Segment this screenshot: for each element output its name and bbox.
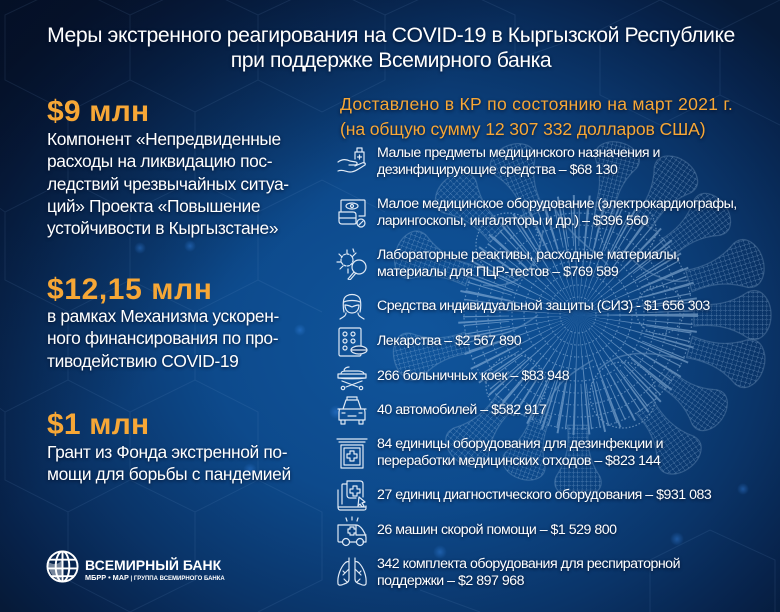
item: laboratory reagents: Лабораторные реактивы, расходные материалы,	[377, 246, 679, 262]
funding 1 description: устойчивости в Кыргызстане»	[47, 218, 278, 238]
item: respiratory equipment: 342 комплекта оборудования для респираторной	[377, 556, 680, 572]
item: small medical equipment	[376, 196, 737, 231]
funding 2 description	[47, 306, 280, 372]
icon: medicine	[338, 327, 368, 357]
funding 2 description: ного финансирования по про-	[47, 328, 278, 348]
item: disinfection equipment	[376, 436, 665, 470]
item: disinfection equipment: переработки медицинских отходов – $823 144	[377, 453, 660, 469]
funding 1 amount: $9 млн	[47, 95, 149, 128]
logo: World Bank	[46, 550, 225, 582]
funding 1 description: ций» Проекта «Повышение	[47, 196, 260, 216]
icon: person with mask	[339, 294, 365, 320]
item: laboratory reagents: материалы для ПЦР-тестов – $769 589	[377, 264, 618, 280]
item: small medical items: дезинфицирующие средства – $68 130	[377, 162, 617, 178]
funding 3 amount: $1 млн	[47, 408, 149, 441]
item: small medical items: Малые предметы медицинского назначения и	[377, 144, 660, 160]
icon: lungs	[337, 557, 367, 586]
item: respiratory equipment	[376, 556, 681, 590]
funding 1 description: расходы на ликвидацию пос-	[47, 151, 272, 171]
delivered heading	[338, 94, 733, 141]
item: PPE: Средства индивидуальной защиты (СИЗ) - $1 656 303	[377, 298, 710, 314]
item: laboratory reagents	[376, 246, 680, 281]
icon: hospital bed	[337, 366, 367, 390]
icon: diagnostic equipment	[337, 480, 367, 511]
item: small medical equipment: ларингоскопы, ингаляторы и др.) – $396 560	[377, 213, 648, 229]
funding 3 description	[47, 442, 292, 486]
delivered heading: Доставлено в КР по состоянию на март 2021 г.	[340, 94, 733, 114]
item: diagnostic equipment: 27 единиц диагностического оборудования – $931 083	[377, 486, 711, 502]
item: cars: 40 автомобилей – $582 917	[377, 402, 546, 418]
delivered heading: (на общую сумму 12 307 332 долларов США)	[340, 118, 706, 138]
logo globe	[46, 550, 78, 582]
funding 2 description: в рамках Механизма ускорен-	[47, 306, 279, 326]
item: small medical equipment: Малое медицинское оборудование (электрокардиографы,	[377, 196, 737, 212]
title: Меры экстренного реагирования на COVID-19 в Кыргызской Республике	[47, 24, 735, 47]
icon: car	[337, 396, 367, 425]
icon: medical equipment	[338, 199, 366, 228]
item: disinfection equipment: 84 единицы оборудования для дезинфекции и	[377, 436, 663, 452]
funding 2 amount: $12,15 млн	[47, 273, 212, 306]
logo name: ВСЕМИРНЫЙ БАНК	[85, 556, 221, 572]
funding 1 description: ледствий чрезвычайных ситуа-	[47, 174, 289, 194]
funding 3 description: мощи для борьбы с пандемией	[47, 464, 291, 484]
title	[47, 24, 735, 74]
icon: hand and sanitizer	[337, 147, 366, 173]
item: ambulances: 26 машин скорой помощи – $1 529 800	[377, 522, 617, 538]
item: hospital beds: 266 больничных коек – $83 948	[377, 368, 569, 384]
icon: disinfection equipment	[336, 438, 368, 469]
funding 3 description: Грант из Фонда экстренной по-	[47, 442, 287, 462]
item: small medical items	[376, 144, 661, 180]
icon: ambulance	[337, 516, 367, 546]
funding 1 description: Компонент «Непредвиденные	[47, 129, 281, 149]
item: medicines: Лекарства – $2 567 890	[377, 332, 521, 348]
icon: virus under magnifier	[336, 248, 367, 280]
funding 1 description	[47, 129, 289, 240]
funding 2 description: тиводействию COVID-19	[47, 351, 238, 371]
logo subtitle: МБРР • МАР | ГРУППА ВСЕМИРНОГО БАНКА	[85, 573, 225, 582]
title: при поддержке Всемирного банка	[231, 48, 551, 72]
item: respiratory equipment: поддержки – $2 897 968	[377, 573, 524, 589]
